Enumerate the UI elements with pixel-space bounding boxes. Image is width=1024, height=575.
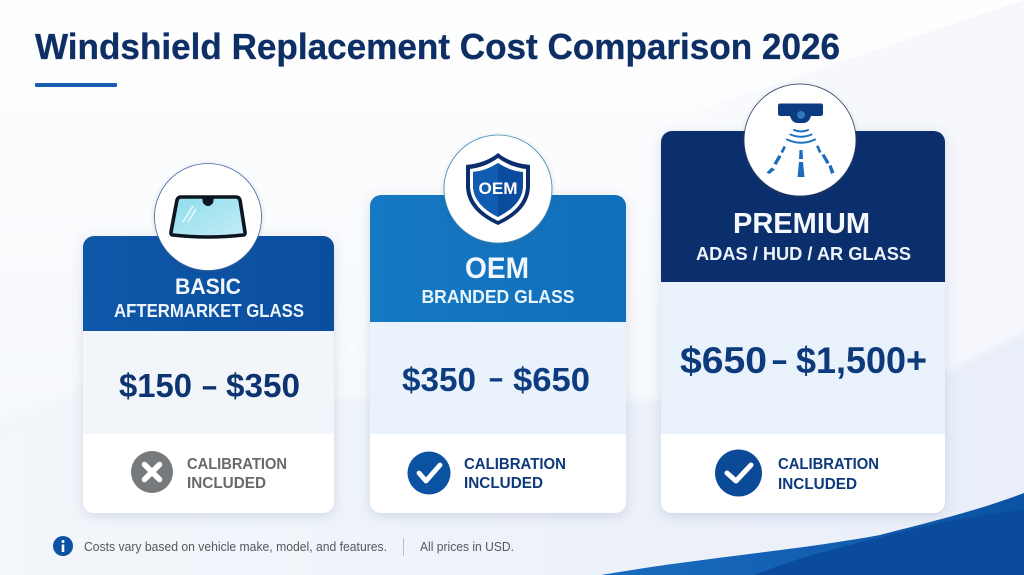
currency note: All prices in USD. xyxy=(420,540,514,554)
header band xyxy=(83,236,334,331)
icon: windshield xyxy=(154,164,262,270)
price: $350 xyxy=(402,362,476,399)
price: $150 xyxy=(119,368,192,405)
panel: premium xyxy=(661,84,945,513)
calibration label: CALIBRATION xyxy=(464,456,566,473)
heading: OEM xyxy=(465,252,529,285)
title: Windshield Replacement Cost Comparison 2026 xyxy=(35,26,840,67)
price: $1,500+ xyxy=(796,340,927,381)
header band xyxy=(661,131,945,282)
footer note xyxy=(53,536,514,556)
calibration label xyxy=(187,456,287,492)
price: $650 xyxy=(680,340,767,381)
header band xyxy=(370,195,626,322)
subheading: BRANDED GLASS xyxy=(422,287,574,307)
icon: check xyxy=(715,450,762,496)
calibration label: CALIBRATION xyxy=(187,456,287,473)
calibration label: INCLUDED xyxy=(464,475,543,492)
panel: oem xyxy=(370,135,626,513)
price xyxy=(680,339,927,381)
price: – xyxy=(772,339,787,380)
price xyxy=(402,360,590,399)
calibration label xyxy=(464,456,566,492)
icon: shield xyxy=(444,135,552,243)
title underline xyxy=(35,83,117,87)
icon: cross xyxy=(131,451,173,493)
heading: PREMIUM xyxy=(733,208,870,240)
price: – xyxy=(202,368,217,405)
price: $350 xyxy=(226,368,300,405)
price: $650 xyxy=(513,362,590,399)
calibration label: INCLUDED xyxy=(778,476,857,493)
price band xyxy=(83,331,334,434)
subheading: ADAS / HUD / AR GLASS xyxy=(696,244,911,264)
card base xyxy=(370,195,626,513)
icon: info xyxy=(53,536,73,556)
icon: check xyxy=(408,452,450,494)
bottom right wave xyxy=(601,493,1024,575)
card base xyxy=(661,131,945,513)
price xyxy=(119,368,300,405)
icon: adas camera xyxy=(744,84,856,196)
price band xyxy=(370,322,626,434)
calibration label: INCLUDED xyxy=(187,475,266,492)
price band xyxy=(661,282,945,434)
heading: BASIC xyxy=(175,274,241,299)
subheading: AFTERMARKET GLASS xyxy=(114,301,304,321)
calibration label xyxy=(778,456,879,493)
icon: shield: OEM xyxy=(478,179,518,198)
price: – xyxy=(489,360,503,397)
note text: Costs vary based on vehicle make, model, and features. xyxy=(84,540,387,554)
calibration label: CALIBRATION xyxy=(778,456,879,473)
card base xyxy=(83,236,334,513)
panel: basic xyxy=(83,164,334,513)
